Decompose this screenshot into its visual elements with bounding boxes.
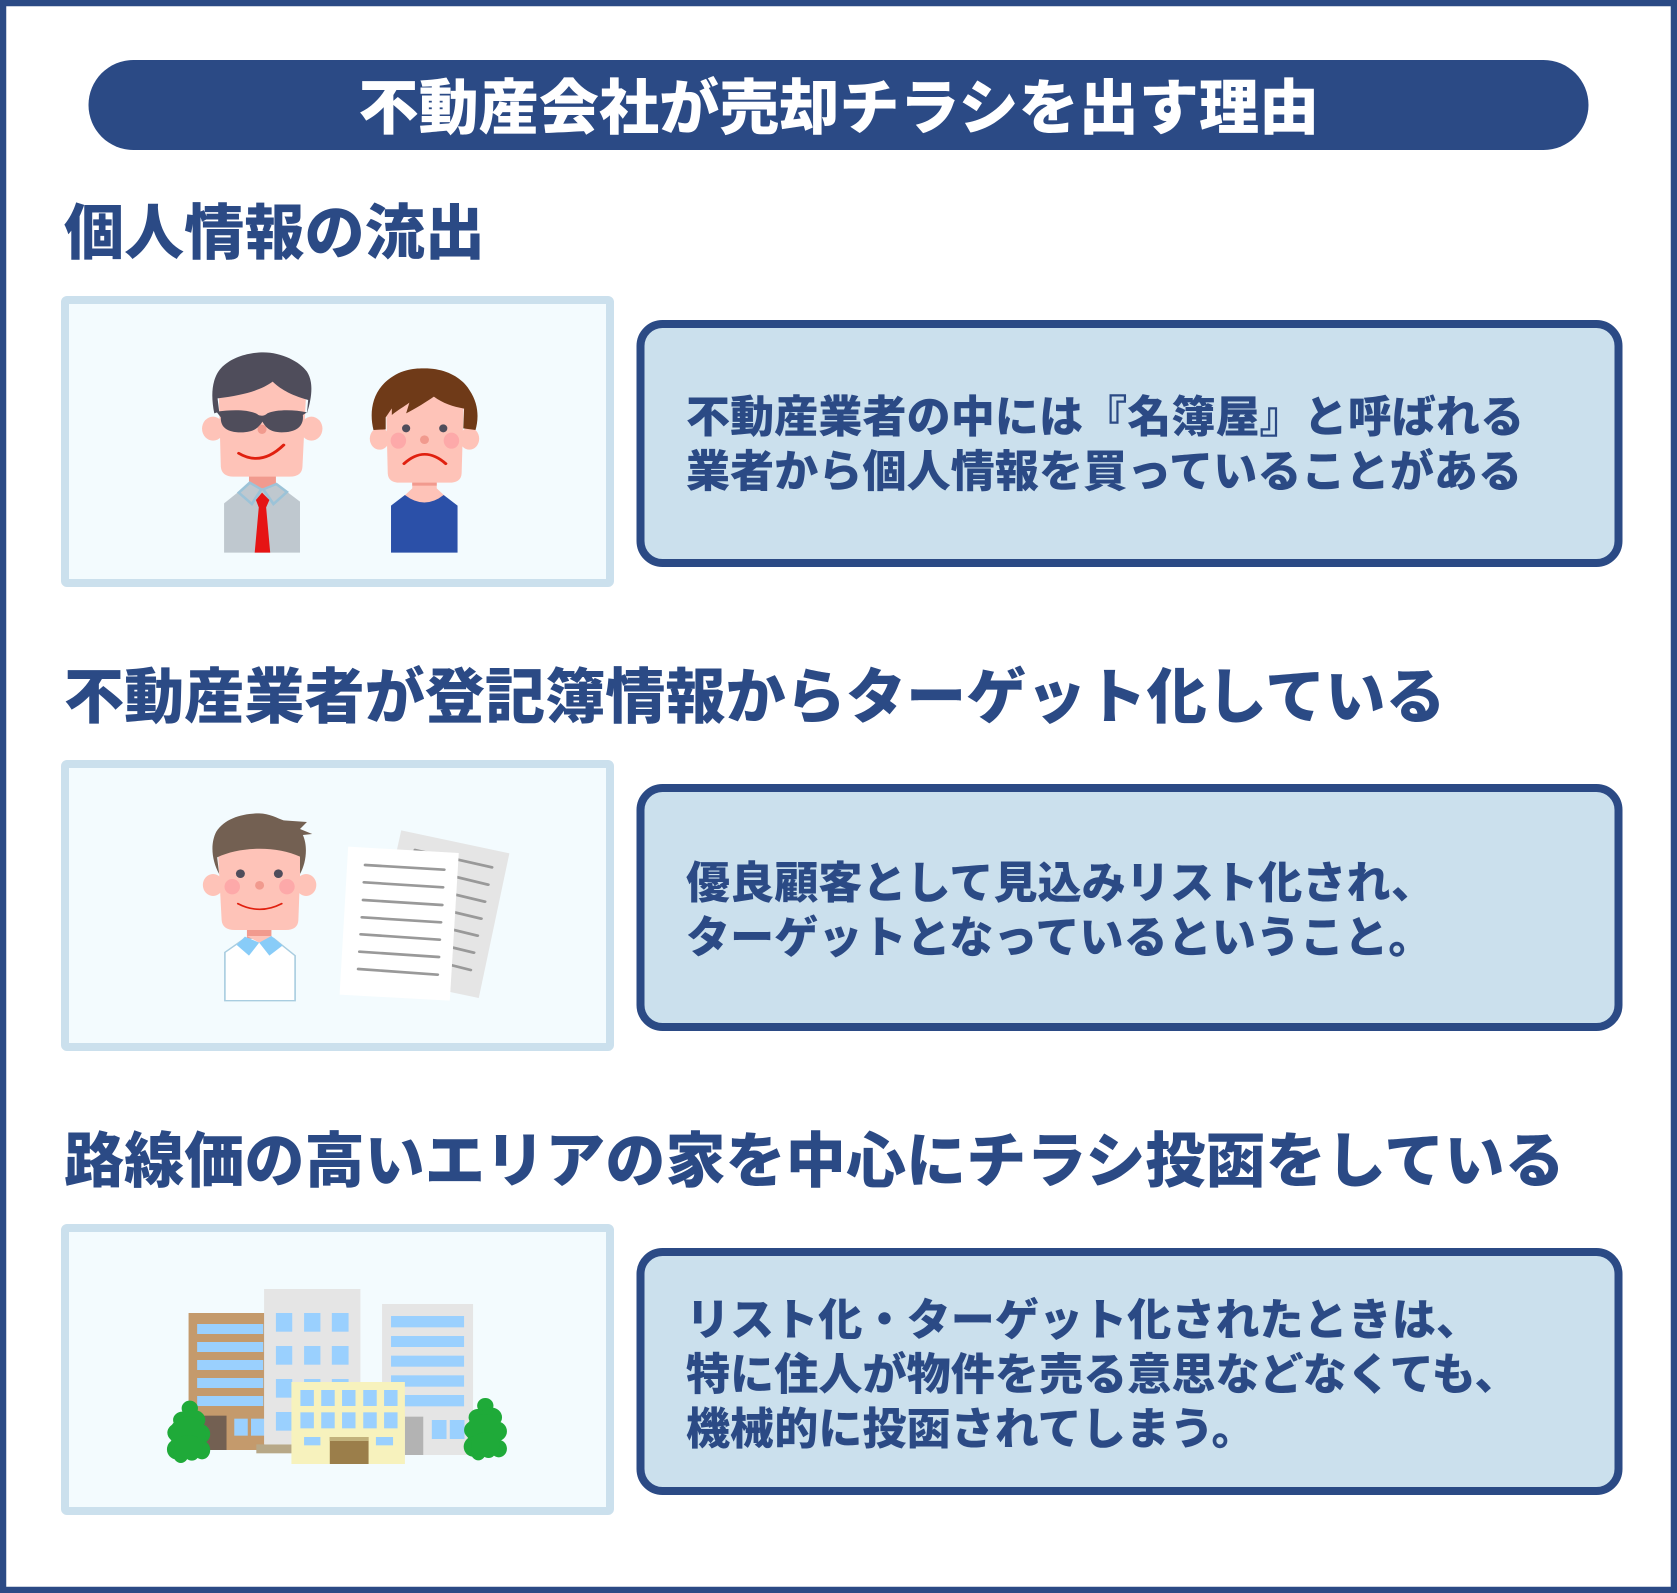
callout 1 text: 不動産業者の中には『名簿屋』と呼ばれる	[686, 393, 1524, 442]
panel: illustration man and documents	[65, 764, 610, 1047]
section 2: targeted from registry	[64, 664, 1618, 1047]
callout 3 text: 機械的に投函されてしまう。	[686, 1405, 1256, 1454]
callout 1 text: 業者から個人情報を買っていることがある	[686, 446, 1522, 496]
callout 3	[640, 1252, 1618, 1491]
title text: 不動産会社が売却チラシを出す理由	[358, 75, 1319, 142]
section 1: personal information leak	[64, 200, 1618, 583]
icon: documents	[340, 830, 509, 1001]
panel: illustration two people	[65, 300, 610, 583]
heading 1: 個人情報の流出	[64, 200, 485, 267]
callout 3 text: 特に住人が物件を売る意思などなくても、	[686, 1350, 1519, 1400]
callout 3 text: リスト化・ターゲット化されたときは、	[686, 1296, 1480, 1345]
icon: buildings and trees	[167, 1289, 507, 1464]
callout 1	[640, 324, 1618, 563]
icon: worried boy	[370, 368, 479, 553]
icon: man in sunglasses	[202, 352, 322, 553]
title banner	[88, 60, 1588, 150]
heading 3: 路線価の高いエリアの家を中心にチラシ投函をしている	[64, 1128, 1565, 1195]
callout 2 text: ターゲットとなっているということ。	[686, 914, 1433, 962]
callout 2	[640, 788, 1618, 1027]
panel: illustration buildings	[65, 1228, 610, 1511]
section 3: high land price areas	[64, 1128, 1618, 1511]
heading 2: 不動産業者が登記簿情報からターゲット化している	[64, 664, 1446, 731]
callout 2 text: 優良顧客として見込みリスト化され、	[686, 859, 1435, 908]
icon: smiling man	[203, 813, 316, 1001]
